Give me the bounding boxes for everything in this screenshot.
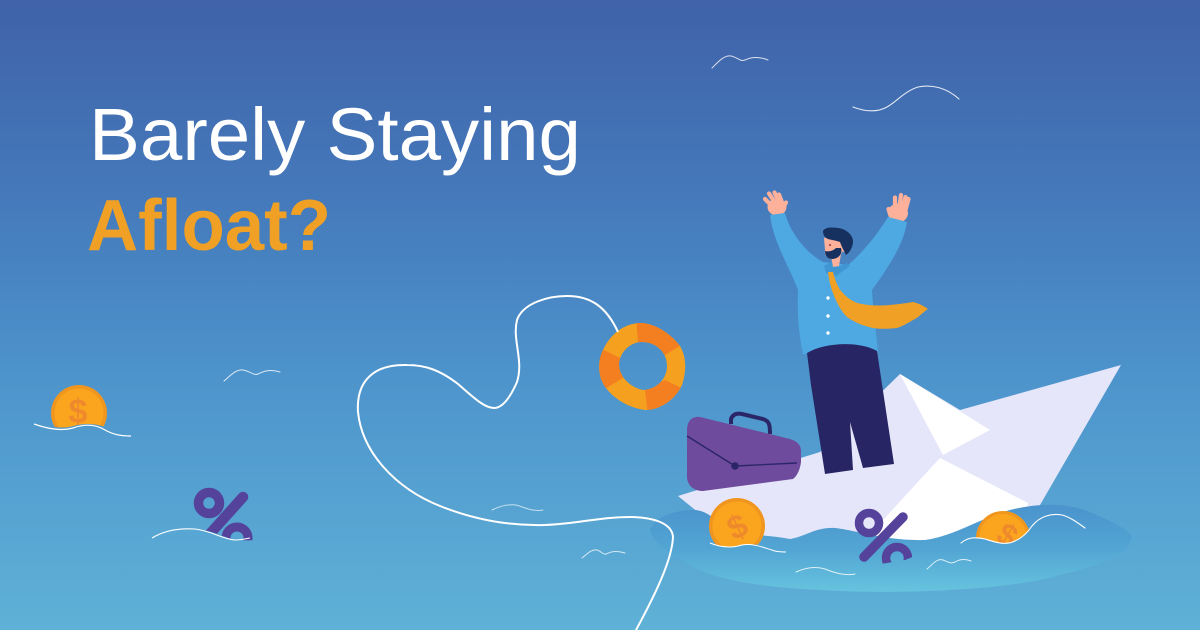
beard xyxy=(825,248,841,259)
coin right xyxy=(976,511,1029,543)
tie xyxy=(828,272,928,329)
hair xyxy=(823,227,853,255)
shirt buttons xyxy=(826,296,830,335)
neck xyxy=(831,254,841,267)
water pool xyxy=(650,505,1132,592)
life ring xyxy=(599,323,686,410)
man xyxy=(765,192,928,474)
collar xyxy=(824,261,850,276)
shirt xyxy=(770,213,907,354)
right hand xyxy=(888,195,908,222)
wave under left coin xyxy=(34,424,131,436)
title: Afloat? xyxy=(87,186,331,266)
coin left xyxy=(51,385,107,428)
coin on boat left: $ xyxy=(721,506,753,547)
percent sign on boat xyxy=(859,513,908,569)
left hand xyxy=(765,192,786,216)
eye xyxy=(829,244,831,246)
briefcase xyxy=(687,414,801,491)
coin right: $ xyxy=(991,515,1024,555)
percent sign left xyxy=(198,492,248,549)
head xyxy=(824,234,843,259)
boat fold front xyxy=(870,458,1028,555)
ear xyxy=(841,246,847,252)
coin on boat left xyxy=(709,498,765,546)
wave under left percent xyxy=(152,529,250,540)
trousers xyxy=(807,344,894,474)
paper boat xyxy=(678,365,1121,560)
birds in sky and sea xyxy=(224,56,959,558)
wave under boat coin xyxy=(710,543,786,552)
title xyxy=(87,93,581,266)
rope xyxy=(358,296,673,630)
coin left: $ xyxy=(69,393,88,431)
title: Barely Staying xyxy=(89,93,581,176)
waves on water xyxy=(796,514,1085,575)
boat fold top xyxy=(900,374,990,455)
